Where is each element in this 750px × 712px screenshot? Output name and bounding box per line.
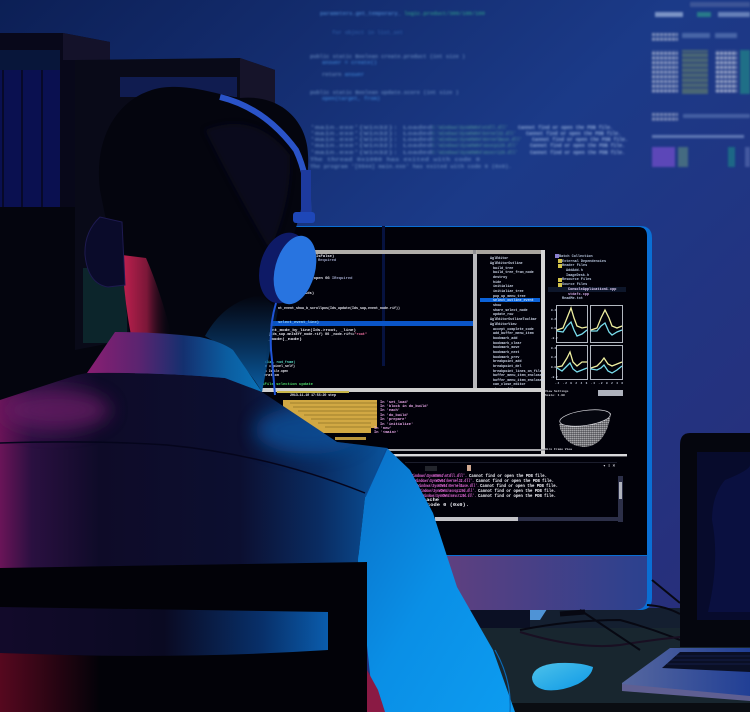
editor: file tree: destroy xyxy=(493,275,507,280)
projected build output: Cannot find or open the PDB file. xyxy=(530,150,625,156)
editor: file tree: select_outline_event xyxy=(493,298,534,303)
console output text: cache xyxy=(423,498,440,503)
editor: file tree: bookmark_move xyxy=(493,345,519,350)
editor: top pane: if ts_open GG IRequired xyxy=(300,276,353,281)
projected code block: functions: answer = create() xyxy=(322,60,377,66)
shirt back xyxy=(0,373,386,568)
left bookcase xyxy=(0,33,110,207)
projected build output: 'main.exe'(Win32): Loaded xyxy=(310,143,432,149)
project panel: ConsoleApplication1.cpp xyxy=(568,287,616,292)
editor: top pane: st_mode(_node) xyxy=(262,337,302,342)
pink log labels: In 'initialize' xyxy=(380,422,413,427)
editor: file tree: initialize_tree xyxy=(493,289,524,294)
highlighted code line xyxy=(270,321,473,326)
editor: file tree: add_buffer_menu_item xyxy=(493,331,534,336)
shirt sleeve xyxy=(358,448,515,712)
projected build output: The program '[5544] main.exe' has exited with code 0 (0x0). xyxy=(310,164,512,170)
editor: file tree: bookmark_clear xyxy=(493,341,522,346)
editor: top pane: le_gate = pixel_self) xyxy=(253,364,295,369)
console output text: C:\Windows\SysWOW64\ntdll.dll'. xyxy=(405,474,467,479)
chart axis labels xyxy=(551,309,558,379)
chart axis labels: 0.2 xyxy=(551,356,556,359)
editor: file tree: initialize xyxy=(493,284,513,289)
editor: top pane xyxy=(253,250,477,390)
laptop xyxy=(622,433,750,701)
chart axis labels: 0.0 xyxy=(551,327,556,330)
editor: file tree: pop_up_menu_tree xyxy=(493,294,526,299)
project panel: ReadMe.txt xyxy=(562,296,583,301)
headband xyxy=(220,97,308,218)
pink log labels: In 'each' xyxy=(380,408,400,413)
editor: file tree: breakpoint_add xyxy=(493,359,522,364)
editor: top pane: nt_mode_by_line(Ids->root, _line) xyxy=(272,328,356,333)
chart axis labels: 0.0 xyxy=(551,366,556,369)
pink log labels: In 'new' xyxy=(374,426,392,431)
pink log labels: In '<main>' xyxy=(374,430,398,435)
shirt xyxy=(0,332,515,712)
projected build output: C:\Windows\SysWOW64\kernel32.dll' xyxy=(432,131,516,137)
pink log labels: In 'block in do_build' xyxy=(380,404,429,409)
editor: top pane: le_end = IsFile.open xyxy=(253,369,289,374)
editor: top pane: nt_event_show_b_scrollpos(Ids_update(Ids_sup,event_node.rif)) xyxy=(278,306,400,311)
editor: file tree: AglEditorOutlineToolbar xyxy=(490,317,537,322)
console output text: Cannot find or open the PDB file. xyxy=(478,489,556,494)
projected build output: The thread 0x1060 has exited with code 0 xyxy=(310,157,480,163)
left ear cup xyxy=(85,217,125,287)
3D bowl render: Wire Frame View xyxy=(545,447,572,451)
mouse xyxy=(532,663,593,690)
headphone cable xyxy=(271,303,276,395)
projected code block: functions: public static Boolean create.product (int size ) xyxy=(310,54,465,60)
chair back xyxy=(0,562,385,712)
shirt yoke seam xyxy=(0,442,365,493)
project panel: Source Files xyxy=(562,282,587,287)
project panel: External Dependencies xyxy=(562,259,606,264)
projected code block: functions: for object in list_set xyxy=(332,30,403,36)
cables behind the desk xyxy=(520,580,680,650)
chart axis labels: 0.4 xyxy=(551,309,556,312)
editor: file tree: bookmark_next xyxy=(493,350,519,355)
editor: file tree: breakpoint_del xyxy=(493,364,522,369)
projected build output: 'main.exe'(Win32): Loaded xyxy=(310,137,432,143)
editor: file tree: buffer_menu_item_enclosed xyxy=(493,378,544,383)
monitor chin xyxy=(440,556,647,610)
projected build output: 'main.exe'(Win32): Loaded xyxy=(310,125,432,131)
chart axis labels: -0.2 xyxy=(551,337,558,340)
project panel: Header Files xyxy=(562,263,587,268)
project panel: stdafx.cpp xyxy=(568,292,589,297)
project panel: AddAdd.h xyxy=(566,268,583,273)
editor: file tree: build_tree_from_node xyxy=(493,270,534,275)
headphones xyxy=(85,97,323,395)
right bookcase xyxy=(75,58,275,350)
pink log labels xyxy=(374,400,429,435)
editor: top pane: IsInitialize, root_frame) xyxy=(253,360,295,365)
projected code block: functions: open(target, from) xyxy=(322,96,380,102)
projected build output xyxy=(310,125,628,170)
projected build output: 'main.exe'(Win32): Loaded xyxy=(310,131,432,137)
editor: top pane: IsFalse) xyxy=(316,254,334,259)
yellow highlighted log xyxy=(283,400,377,433)
desk xyxy=(440,608,750,712)
console output text xyxy=(405,474,558,508)
editor: file tree: bookmark_prev xyxy=(493,355,519,360)
editor: top pane: Ids) xyxy=(305,291,314,296)
console output text: Cannot find or open the PDB file. xyxy=(480,484,558,489)
neck xyxy=(122,255,278,392)
console panel xyxy=(385,454,627,522)
projected data table xyxy=(652,2,750,167)
projected build output: 'main.exe'(Win32): Loaded xyxy=(310,150,432,156)
pink log labels: In 'prepare' xyxy=(380,417,407,422)
projected code block: functions: public static Boolean update.score (int size ) xyxy=(310,90,459,96)
editor: file tree: share_select_node xyxy=(493,308,528,313)
console output text: Cannot find or open the PDB file. xyxy=(476,479,554,484)
editor: file tree: hide xyxy=(493,280,501,285)
projected build output: C:\Windows\SysWOW64\msvcr120.dll' xyxy=(432,150,518,156)
person xyxy=(0,87,515,712)
projected build output: C:\Windows\SysWOW64\msvcp120.dll' xyxy=(432,143,518,149)
editor: file tree: update_row xyxy=(493,312,514,317)
projected build output: C:\Windows\SysWOW64\KernelBase.dll' xyxy=(432,137,522,143)
editor: file tree: can_close_editor xyxy=(493,382,526,387)
output pane with yellow log xyxy=(262,388,545,451)
projected code block: functions: return answer xyxy=(322,72,364,78)
monitor xyxy=(250,226,652,628)
3D bowl render: View Settings xyxy=(545,389,569,393)
projected build output: C:\Windows\SysWOW64\ntdll.dll' xyxy=(432,125,508,131)
output pane with yellow log: 2013-11-10 17:56:20 step xyxy=(290,394,336,398)
console panel: ▾ ⁝ × xyxy=(603,463,616,469)
head and hair xyxy=(99,87,308,392)
right ear cup xyxy=(252,227,316,309)
editor: file tree: buffer_menu_item_enclosed xyxy=(493,373,544,378)
projected code block: functions xyxy=(310,11,485,102)
editor: top pane: if (Ids_sup.mnIsEff_node.rif) GG _node.rif<="root" xyxy=(262,332,367,337)
bookshelves in the background xyxy=(0,33,275,407)
editor: file tree: AglEditor xyxy=(490,256,508,261)
editor: top pane: Required xyxy=(318,258,337,263)
editor: file tree: show xyxy=(493,303,502,308)
projected build output: Cannot find or open the PDB file. xyxy=(532,137,628,143)
projected code on the wall xyxy=(310,2,750,170)
projected build output: Cannot find or open the PDB file. xyxy=(518,125,613,131)
editor: file tree: change_file xyxy=(493,387,515,392)
console scrollbars xyxy=(435,517,618,521)
console output text: C:\Windows\SysWOW64\msvcr120d.dll'. xyxy=(418,494,476,499)
project panel: Resource Files xyxy=(562,277,591,282)
editor: file tree: AglEditorOutline xyxy=(490,261,523,266)
editor: file tree: AglEditorView xyxy=(490,322,517,327)
editor: file tree: accept_complete_code xyxy=(493,327,534,332)
chart axis labels: 0.2 xyxy=(551,318,556,321)
chart axis labels: 0.4 xyxy=(551,347,556,350)
line charts: -4 -2 0 2 4 6 -4 -2 0 2 4 6 xyxy=(555,382,623,385)
project panel xyxy=(548,254,626,301)
projected code block: functions: parameters.get_temporary_ logic.product/300/100/100 xyxy=(320,11,485,17)
pink log labels: In 'set_load' xyxy=(380,400,409,405)
shirt collar xyxy=(87,332,262,392)
projected build output: Cannot find or open the PDB file. xyxy=(526,131,621,137)
monitor stand xyxy=(470,605,530,628)
monitor body xyxy=(250,226,652,610)
line charts xyxy=(551,306,623,385)
console output text: C:\Windows\SysWOW64\kernel32.dll'. xyxy=(409,479,474,484)
laptop screen xyxy=(680,433,750,647)
hair highlight xyxy=(205,124,290,250)
project panel: Batch Collection xyxy=(559,254,593,259)
editor: file tree xyxy=(473,250,545,455)
editor: top pane: le_operation xyxy=(253,373,280,378)
console output text: Cannot find or open the PDB file. xyxy=(478,494,556,499)
console output text: Cannot find or open the PDB file. xyxy=(469,474,547,479)
console output text: C:\Windows\SysWOW64\msvcp120d.dll'. xyxy=(414,489,476,494)
laptop keyboard xyxy=(662,652,750,672)
editor: top pane: select_event_line) xyxy=(278,320,319,325)
monitor screen xyxy=(250,227,647,555)
laptop base xyxy=(622,648,750,700)
editor: top pane: // IsFile selection update xyxy=(253,382,314,387)
console output text: code 0 (0x0). xyxy=(427,503,469,508)
3D bowl render: Scale: 1.00 xyxy=(545,393,565,397)
3D bowl render xyxy=(545,389,623,451)
editor: file tree: build_tree xyxy=(493,266,513,271)
chart axis labels: -0.2 xyxy=(551,376,558,379)
project panel: ImageDesk.h xyxy=(566,273,589,278)
projected build output: Cannot find or open the PDB file. xyxy=(530,143,625,149)
editor: file tree: bookmark_add xyxy=(493,336,517,341)
console output text: C:\Windows\SysWOW64\KernelBase.dll'. xyxy=(412,484,479,489)
pink log labels: In 'do_build' xyxy=(380,413,409,418)
editor: file tree: breakpoint_lines_on_file xyxy=(493,369,542,374)
